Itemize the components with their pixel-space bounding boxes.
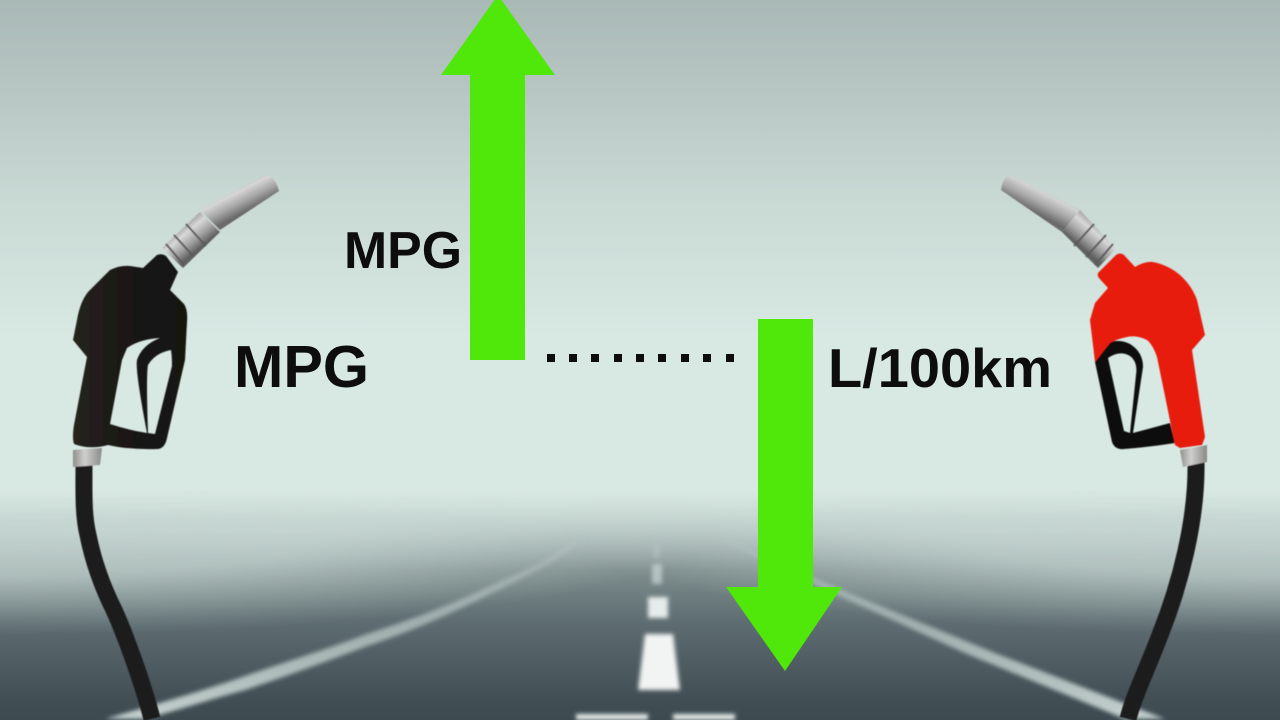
label: MPG beside up arrow: MPG xyxy=(344,222,462,280)
right fuel nozzle red xyxy=(1001,175,1207,719)
spout left xyxy=(200,175,279,230)
trigger guard right xyxy=(1095,341,1175,449)
up arrow xyxy=(441,0,555,360)
label: L/100km: L/100km xyxy=(828,337,1052,399)
nozzle body right xyxy=(1090,254,1205,448)
spout right xyxy=(1001,175,1080,232)
hose right xyxy=(1128,462,1196,719)
down arrow xyxy=(726,319,842,671)
hose left xyxy=(84,462,152,719)
dotted connector xyxy=(547,354,734,362)
road and foggy ground xyxy=(0,490,1280,720)
road centre dashes xyxy=(576,544,735,720)
hose collar left xyxy=(73,448,102,467)
road edge line right xyxy=(722,540,1165,719)
nozzle body left xyxy=(73,254,187,449)
left fuel nozzle black xyxy=(73,175,279,719)
road edge line left xyxy=(105,541,578,719)
label: MPG beside left nozzle: MPG xyxy=(234,334,369,400)
hose collar right xyxy=(1180,445,1207,467)
